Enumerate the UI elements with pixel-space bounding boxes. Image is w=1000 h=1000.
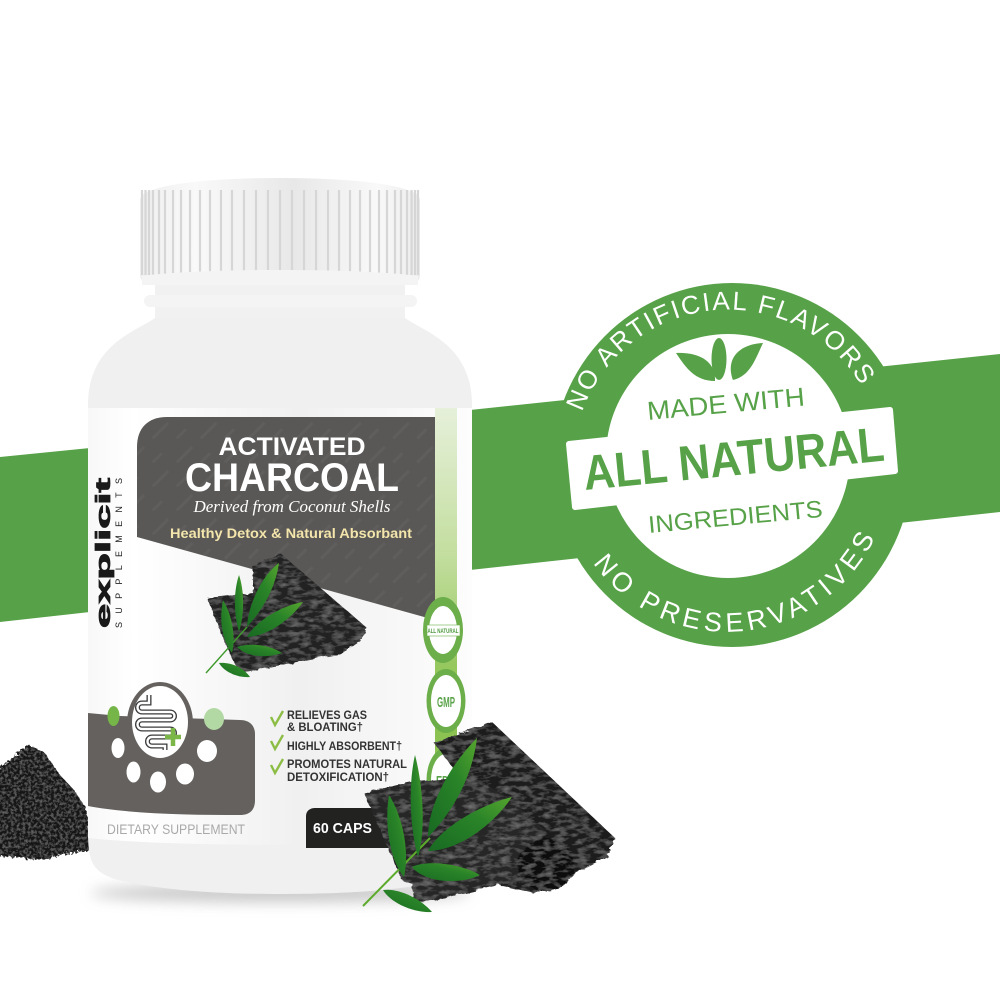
round badge xyxy=(564,283,903,647)
dark title panel xyxy=(137,417,435,620)
dietary supplement label: DIETARY SUPPLEMENT xyxy=(107,821,245,837)
bottle shadow xyxy=(90,884,470,902)
all natural plate xyxy=(569,410,895,507)
all natural text: ALL NATURAL xyxy=(581,418,887,501)
benefits list: PROMOTES NATURAL xyxy=(287,757,407,771)
bottle cap xyxy=(140,178,420,285)
small seal: gmp xyxy=(426,669,466,733)
bottle neck xyxy=(144,282,417,327)
label bamboo sprig xyxy=(206,563,303,677)
badge bottom curved text: NO PRESERVATIVES xyxy=(594,532,873,632)
label charcoal chunk xyxy=(206,553,367,677)
small seal: fda xyxy=(426,748,466,812)
small seal: all natural: ALL NATURAL xyxy=(428,629,459,635)
title: charcoal: CHARCOAL xyxy=(185,456,399,500)
badge outer ring xyxy=(552,283,912,647)
green band left xyxy=(0,448,90,622)
large charcoal chunks xyxy=(364,722,615,905)
benefits list: & BLOATING† xyxy=(287,720,363,734)
benefits list: DETOXIFICATION† xyxy=(287,770,389,784)
charcoal end grain xyxy=(518,839,574,891)
small seal: fda: FDA xyxy=(436,773,456,790)
title: activated: ACTIVATED xyxy=(218,433,366,461)
60 caps tab xyxy=(306,808,400,848)
subtitle: derived from coconut shells: Derived from Coconut Shells xyxy=(193,497,391,516)
tagline: Healthy Detox & Natural Absorbant xyxy=(170,525,412,541)
small seal: gmp: GMP xyxy=(437,694,455,711)
ingredients text: INGREDIENTS xyxy=(647,496,824,539)
made with text: MADE WITH xyxy=(646,382,806,426)
bottle body xyxy=(88,318,472,894)
large bamboo sprig xyxy=(363,738,512,912)
green side strip xyxy=(435,408,457,828)
bottle label xyxy=(88,408,472,845)
icon: intestine circle xyxy=(127,682,193,764)
bottle xyxy=(88,178,472,894)
green band right xyxy=(470,354,1000,570)
brand logo xyxy=(93,477,124,628)
check marks xyxy=(271,711,283,773)
benefits list: HIGHLY ABSORBENT† xyxy=(287,739,402,753)
charcoal powder pile xyxy=(0,745,92,860)
60 caps tab: 60 CAPS xyxy=(313,820,372,837)
upper right charcoal log xyxy=(434,722,615,893)
dots xyxy=(108,706,224,792)
brand logo: SUPPLEMENTS xyxy=(114,478,124,628)
brand logo: explicit xyxy=(93,477,115,628)
benefits list: RELIEVES GAS xyxy=(287,708,367,722)
badge inner circle xyxy=(606,334,850,578)
small seal: all natural xyxy=(423,597,463,663)
lower left charcoal log xyxy=(364,777,545,905)
benefits list xyxy=(271,708,407,784)
badge top curved text: NO ARTIFICIAL FLAVORS xyxy=(566,292,874,410)
icon: three leaves xyxy=(676,338,763,381)
gray icon panel xyxy=(88,713,255,815)
